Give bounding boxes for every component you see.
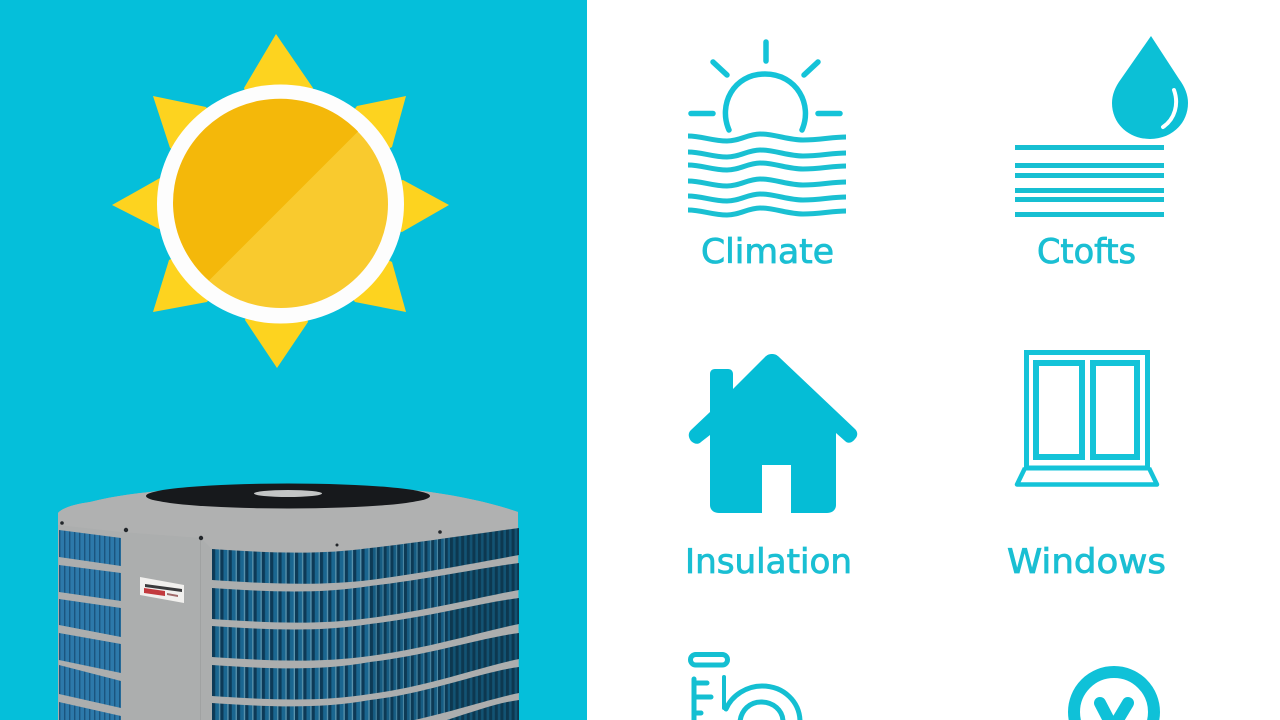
screws (60, 521, 442, 546)
label: Windows: Windows (1007, 542, 1166, 582)
illustration: air conditioner condenser unit (58, 484, 519, 720)
left side fins (59, 525, 121, 720)
panel: right white background (587, 0, 1280, 720)
icon: climate sun over waves (688, 42, 846, 215)
icon: sun (112, 34, 449, 368)
front fins (212, 520, 519, 720)
label: Climate: Climate (701, 232, 834, 272)
icon: water drop over lines (1015, 36, 1188, 217)
icon: house (689, 354, 857, 513)
label: Insulation: Insulation (685, 542, 852, 582)
panel: left teal background (0, 0, 587, 720)
corner panel seam (200, 540, 201, 720)
brand badge (140, 577, 184, 603)
fan opening (146, 484, 430, 508)
label: Ctofts: Ctofts (1037, 232, 1136, 272)
icon: window (1017, 352, 1157, 484)
icon: partially visible thermostat and coil (690, 654, 800, 720)
icon: partially visible circle badge (1074, 672, 1154, 720)
